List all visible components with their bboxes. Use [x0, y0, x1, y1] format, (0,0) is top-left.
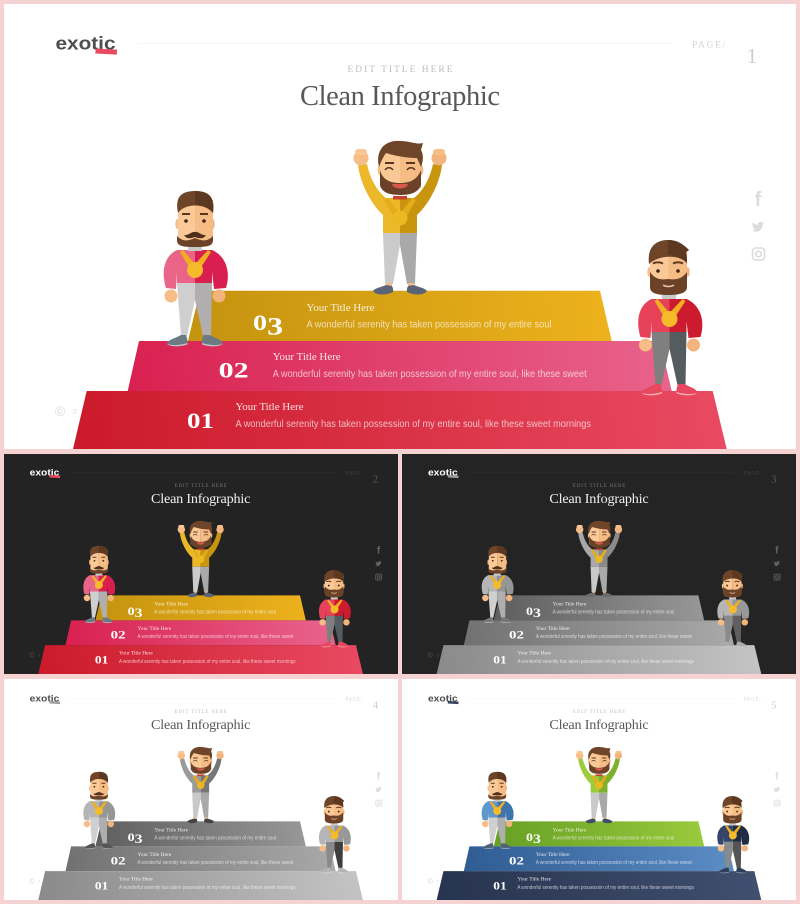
logo: exotic — [30, 468, 59, 478]
page label: PAGE/ — [744, 472, 761, 477]
step 02: 02 — [509, 629, 524, 641]
panel: slide 5 — [402, 679, 796, 900]
title: Clean Infographic — [300, 81, 500, 112]
step 01 — [38, 645, 363, 674]
step 03: A wonderful serenity has taken possession of my entire soul — [306, 318, 552, 330]
step 03: 3 — [267, 312, 283, 340]
step 02 — [65, 846, 336, 871]
step 03: A wonderful serenity has taken possession of my entire soul — [553, 836, 674, 842]
step 01: 01 — [95, 655, 108, 667]
copyright mark — [55, 403, 77, 419]
subtitle: EDIT TITLE HERE — [175, 710, 227, 715]
step 03: 3 — [533, 832, 541, 846]
slide 1 background — [4, 4, 796, 449]
character: left man — [482, 546, 514, 623]
slide 4 background — [4, 679, 398, 900]
icon: instagram — [376, 800, 382, 806]
icon: twitter — [774, 787, 780, 792]
logo: exotic — [30, 694, 59, 704]
step 01: Your Title Here — [119, 877, 153, 883]
icon: instagram — [752, 248, 764, 260]
character: right man — [717, 570, 749, 647]
step 02: A wonderful serenity has taken possession of my entire soul, like these sweet — [536, 860, 692, 866]
panel: slide 3 — [402, 454, 796, 674]
step 02 — [65, 620, 336, 645]
step 03: Your Title Here — [154, 827, 189, 833]
step 03: Your Title Here — [553, 827, 587, 833]
step 01: A wonderful serenity has taken possession of my entire soul, like these sweet mornings — [236, 418, 591, 430]
copyright mark: 2 — [437, 880, 439, 884]
character: right man — [319, 796, 351, 873]
icon: facebook: f — [775, 545, 779, 556]
character: center winner — [178, 747, 224, 823]
step 03: 0 — [526, 606, 532, 618]
step 03: 0 — [128, 832, 133, 844]
copyright mark: 2 — [73, 409, 77, 416]
subtitle: EDIT TITLE HERE — [175, 484, 227, 489]
icon: twitter — [774, 561, 780, 566]
step 03: A wonderful serenity has taken possession of my entire soul — [154, 610, 276, 616]
copyright mark: 2 — [38, 654, 40, 658]
step 03 — [95, 595, 306, 620]
step 02 — [464, 846, 734, 871]
step 02: Your Title Here — [273, 351, 341, 363]
step 02: Your Title Here — [137, 626, 172, 632]
copyright mark: © — [29, 878, 34, 886]
panel: slide 4 — [4, 679, 398, 900]
step 02: Your Title Here — [137, 852, 172, 858]
step 02: 02 — [111, 855, 126, 867]
character: right man — [319, 570, 351, 647]
step 03: Your Title Here — [306, 302, 375, 314]
copyright mark: © — [55, 403, 66, 419]
step 03 — [188, 291, 612, 341]
page number: 4 — [373, 700, 379, 711]
step 03: A wonderful serenity has taken possession of my entire soul — [154, 836, 276, 842]
copyright mark — [29, 878, 40, 886]
character: left man — [482, 772, 514, 849]
step 02: 02 — [219, 358, 249, 382]
icon: instagram — [774, 800, 780, 806]
step 01: 01 — [493, 881, 507, 893]
character: left man — [83, 772, 115, 849]
copyright mark: © — [29, 652, 34, 660]
step 03 — [95, 821, 306, 846]
step 02: A wonderful serenity has taken possession of my entire soul, like these sweet — [273, 368, 587, 380]
step 02: A wonderful serenity has taken possession of my entire soul, like these sweet — [536, 634, 692, 640]
slide 4 contents — [29, 694, 382, 900]
slide 5 background — [402, 679, 796, 900]
character: center winner — [354, 141, 446, 295]
copyright mark — [428, 652, 439, 660]
step 02 — [128, 341, 672, 391]
step 01 — [437, 645, 761, 674]
subtitle: EDIT TITLE HERE — [573, 484, 625, 489]
page label: PAGE/ — [346, 472, 363, 477]
step 03: A wonderful serenity has taken possession of my entire soul — [553, 610, 674, 616]
copyright mark: 2 — [437, 654, 439, 658]
icon: twitter — [752, 222, 764, 232]
icon: instagram — [774, 574, 780, 580]
step 01: A wonderful serenity has taken possession of my entire soul, like these sweet mornings — [119, 659, 296, 665]
logo: exotic — [428, 468, 458, 478]
step 01: Your Title Here — [517, 877, 552, 883]
title: Clean Infographic — [151, 717, 250, 733]
logo: exotic — [56, 34, 116, 54]
step 03: 3 — [135, 832, 143, 846]
icon: twitter — [375, 561, 381, 566]
panel: slide 1 — [4, 4, 796, 449]
step 03: 0 — [253, 310, 264, 335]
copyright mark: © — [428, 878, 433, 886]
slide 5 contents — [428, 694, 780, 900]
slide 3 background — [402, 454, 796, 674]
step 03: 0 — [128, 606, 133, 618]
icon: facebook: f — [377, 771, 381, 782]
step 01 — [73, 391, 727, 449]
step 02: Your Title Here — [536, 626, 570, 632]
page number: 3 — [771, 474, 776, 485]
character: right man — [717, 796, 749, 873]
icon: facebook: f — [775, 771, 779, 782]
step 01: A wonderful serenity has taken possession of my entire soul, like these sweet mornings — [517, 885, 694, 891]
logo: exotic — [428, 694, 458, 704]
copyright mark — [428, 878, 439, 886]
step 03 — [494, 595, 704, 620]
icon: facebook: f — [755, 189, 762, 211]
character: left man — [164, 191, 228, 346]
page label: PAGE/ — [346, 698, 363, 703]
page number: 2 — [373, 474, 378, 485]
step 02 — [464, 620, 734, 645]
step 03: 3 — [135, 606, 143, 620]
page number: 1 — [747, 44, 757, 68]
subtitle: EDIT TITLE HERE — [573, 710, 625, 715]
page label: PAGE/ — [744, 698, 761, 703]
step 01: Your Title Here — [119, 651, 153, 657]
slide 2 contents — [29, 468, 382, 674]
step 01: 01 — [187, 408, 214, 433]
step 01 — [437, 871, 761, 900]
page label: PAGE/ — [692, 40, 725, 50]
panel: slide 2 — [4, 454, 398, 674]
step 03 — [494, 821, 704, 846]
step 02: A wonderful serenity has taken possession of my entire soul, like these sweet — [137, 860, 294, 866]
character: left man — [83, 546, 115, 623]
title: Clean Infographic — [151, 491, 250, 507]
icon: facebook: f — [377, 545, 381, 556]
step 01: 01 — [493, 655, 507, 667]
character: center winner — [576, 521, 622, 597]
copyright mark — [29, 652, 40, 660]
character: center winner — [178, 521, 224, 597]
step 02: 02 — [111, 629, 126, 641]
step 01: Your Title Here — [236, 401, 304, 413]
icon: twitter — [375, 787, 381, 792]
step 01 — [38, 871, 363, 900]
step 02: 02 — [509, 855, 524, 867]
step 01: Your Title Here — [517, 651, 552, 657]
title: Clean Infographic — [549, 491, 649, 507]
icon: instagram — [376, 574, 382, 580]
step 01: A wonderful serenity has taken possession of my entire soul, like these sweet mornings — [119, 885, 296, 891]
step 02: A wonderful serenity has taken possession of my entire soul, like these sweet — [137, 634, 294, 640]
page number: 5 — [771, 700, 776, 711]
slide 3 contents — [428, 468, 780, 674]
step 01: 01 — [95, 881, 108, 893]
slide 2 background — [4, 454, 398, 674]
step 03: Your Title Here — [553, 601, 587, 607]
step 03: Your Title Here — [154, 601, 189, 607]
step 01: A wonderful serenity has taken possession of my entire soul, like these sweet mornings — [517, 659, 694, 665]
character: right man — [638, 240, 702, 395]
copyright mark: © — [428, 652, 433, 660]
step 03: 3 — [533, 606, 541, 620]
copyright mark: 2 — [38, 880, 40, 884]
step 03: 0 — [526, 832, 532, 844]
subtitle: EDIT TITLE HERE — [348, 65, 453, 75]
character: center winner — [576, 747, 622, 823]
title: Clean Infographic — [549, 717, 649, 733]
step 02: Your Title Here — [536, 852, 570, 858]
